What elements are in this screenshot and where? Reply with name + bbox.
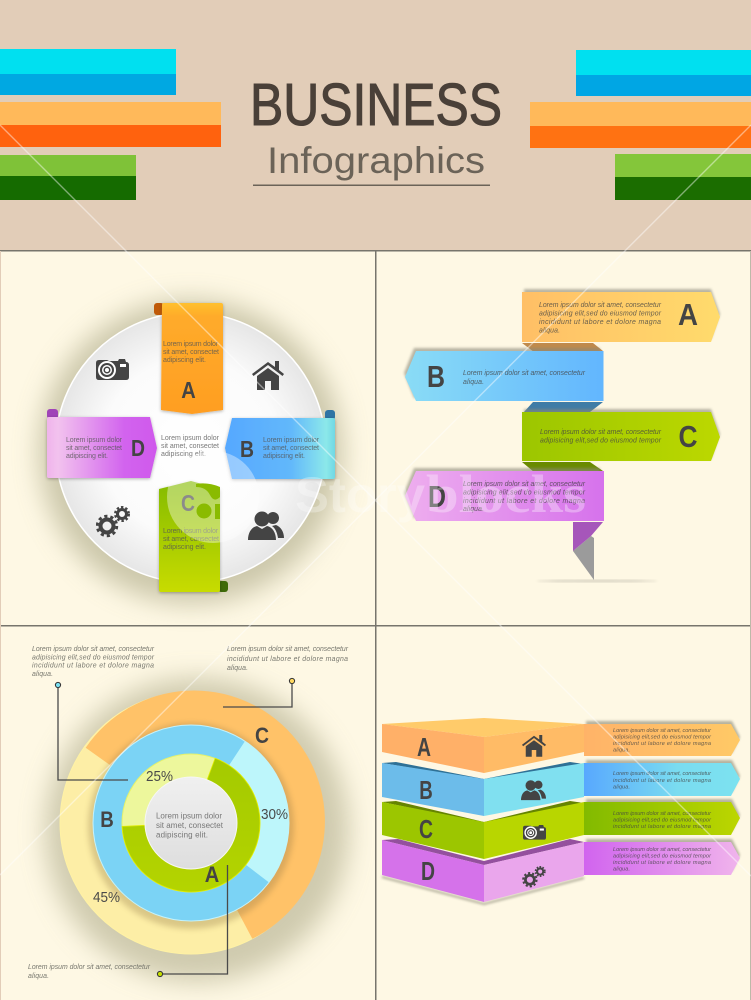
arrow D: incididunt ut labore et dolore magna — [463, 498, 585, 505]
ribbon D: adipiscing elit. — [66, 453, 108, 460]
layer C — [382, 801, 584, 859]
ribbon C: sit amet, consectet — [163, 536, 219, 543]
inner ring — [122, 754, 260, 892]
ribbon B: B — [240, 436, 254, 462]
ribbon A: adipiscing elit. — [163, 357, 206, 364]
inner ring segment A — [122, 758, 260, 892]
arrow C: adipisicing elit,sed do eiusmod tempor — [540, 438, 662, 444]
arrow A — [584, 721, 740, 756]
icon: house — [252, 361, 284, 390]
arrow D: Lorem ipsum dolor sit amet, consectetur — [613, 847, 712, 853]
arrow B: aliqua. — [463, 379, 484, 386]
centre text: Lorem ipsum dolor — [161, 435, 220, 442]
arrow B — [584, 760, 740, 796]
arrow A: incididunt ut labore et dolore magna — [613, 741, 711, 747]
callout: top right: aliqua. — [227, 665, 248, 672]
arrow A: Lorem ipsum dolor sit amet, consectetur — [613, 728, 712, 734]
ribbon B: adipiscing elit. — [263, 453, 305, 460]
callout: bottom: aliqua. — [28, 973, 49, 980]
centre text: adipiscing elit. — [161, 451, 206, 458]
right colour bars — [530, 50, 751, 200]
centre text: adipiscing elit. — [156, 830, 208, 840]
arrow C: incididunt ut labore et dolore magna — [613, 824, 711, 830]
arrow D: adipisicing elit,sed do eiusmod tempor — [463, 490, 586, 496]
layer A — [382, 718, 584, 773]
middle ring highlight segment — [229, 741, 289, 882]
ribbon D: sit amet, consectet — [66, 445, 122, 452]
callout: top left: adipisicing elit,sed do eiusmod tempor — [32, 654, 155, 662]
ribbon C: adipiscing elit. — [163, 544, 206, 551]
callout: top left — [32, 646, 155, 780]
title underline — [253, 184, 490, 186]
ribbon B: Lorem ipsum dolor — [263, 437, 320, 444]
middle ring shadow — [88, 723, 294, 929]
centre text: sit amet, consectet — [161, 443, 219, 450]
outer ring segment C — [86, 691, 325, 939]
ribbon A: sit amet, consectet — [163, 349, 219, 356]
icon: camera — [96, 359, 129, 380]
centre text — [161, 435, 220, 458]
centre text: Lorem ipsum dolor — [156, 812, 222, 820]
arrow D: D — [428, 479, 446, 514]
ribbon A: Lorem ipsum dolor — [163, 341, 219, 348]
arrow B — [404, 348, 604, 401]
arrow C: adipisicing elit,sed do eiusmod tempor — [613, 818, 712, 824]
rings shadow — [45, 678, 349, 982]
ribbon D — [47, 409, 157, 478]
panel: circular cross diagram — [39, 300, 343, 604]
callout: top right — [223, 646, 349, 707]
segment letters — [100, 723, 269, 887]
arrow A: A — [678, 297, 698, 332]
watermark — [0, 125, 751, 876]
layer B — [382, 762, 584, 816]
arrow C: Lorem ipsum dolor sit amet, consectetur — [613, 811, 712, 817]
layer D — [382, 839, 584, 904]
panel: stacked 3D layers — [382, 718, 740, 904]
arrow A: incididunt ut labore et dolore magna — [539, 319, 661, 326]
arrow D: aliqua. — [463, 506, 484, 513]
arrow A: aliqua. — [539, 328, 560, 334]
icon: people — [248, 512, 284, 540]
segment letters: A — [205, 862, 219, 887]
percentages: 30% — [261, 807, 288, 823]
percentages — [93, 769, 288, 906]
ribbon A: A — [181, 377, 196, 403]
callout: top left: aliqua. — [32, 671, 53, 678]
arrow B: B — [427, 359, 445, 394]
panel divider lines — [0, 250, 751, 1000]
arrow D: adipisicing elit,sed do eiusmod tempor — [613, 854, 712, 860]
arrow A — [522, 289, 720, 342]
ribbon B: sit amet, consectet — [263, 445, 319, 452]
left colour bars — [0, 49, 221, 200]
disc shadow — [39, 300, 343, 604]
layer C: C — [419, 814, 433, 844]
ribbon C — [159, 481, 228, 592]
arrow D: aliqua. — [613, 866, 630, 872]
disc — [56, 312, 326, 582]
arrow A: aliqua. — [613, 748, 630, 754]
arrow D — [584, 839, 740, 875]
arrow B: aliqua. — [613, 784, 630, 790]
watermark: blocks — [426, 464, 586, 524]
arrow C: C — [678, 419, 698, 454]
ribbon D: D — [131, 435, 145, 461]
percentages: 25% — [146, 769, 173, 785]
outer ring — [60, 691, 325, 954]
folded tail — [537, 522, 657, 582]
arrow C — [522, 409, 720, 461]
centre disc — [145, 777, 237, 869]
header band — [0, 0, 751, 250]
layer A: A — [417, 732, 431, 762]
arrow B: incididunt ut labore et dolore magna — [613, 778, 711, 784]
panel: concentric ring chart — [28, 646, 349, 982]
callout: bottom — [28, 865, 228, 980]
arrow B: Lorem ipsum dolor sit amet, consectetur — [613, 771, 712, 777]
ribbon D: Lorem ipsum dolor — [66, 437, 123, 444]
panel: origami arrow steps — [404, 289, 720, 582]
ribbon C: Lorem ipsum dolor — [163, 528, 219, 535]
arrow B: Lorem ipsum dolor sit amet, consectetur — [463, 370, 586, 377]
percentages: 45% — [93, 890, 120, 906]
title: BUSINESS — [250, 72, 502, 138]
arrow C — [584, 799, 740, 835]
arrow D: Lorem ipsum dolor sit amet, consectetur — [463, 481, 586, 488]
watermark: Story — [295, 467, 425, 523]
arrow A: Lorem ipsum dolor sit amet, consectetur — [539, 302, 662, 309]
arrow A: adipisicing elit,sed do eiusmod tempor — [613, 734, 712, 740]
fold connectors — [522, 343, 603, 472]
callout: top left: Lorem ipsum dolor sit amet, consectetur — [32, 646, 155, 653]
centre text: sit amet, consectet — [156, 821, 224, 830]
layer B: B — [419, 775, 433, 805]
middle ring — [93, 725, 289, 921]
centre text — [156, 812, 224, 840]
arrow C: Lorem ipsum dolor sit amet, consectetur — [540, 429, 662, 436]
arrow D: incididunt ut labore et dolore magna — [613, 860, 711, 866]
segment letters: C — [255, 723, 269, 748]
callout: top right: incididunt ut labore et dolore magna — [227, 656, 348, 663]
ribbon C: C — [181, 490, 195, 516]
callout: bottom: Lorem ipsum dolor sit amet, consectetur — [28, 964, 151, 971]
arrow A: adipisicing elit,sed do eiusmod tempor — [539, 310, 662, 318]
layer D: D — [421, 856, 435, 886]
segment letters: B — [100, 807, 114, 832]
ribbon B — [225, 410, 335, 479]
subtitle: Infographics — [267, 140, 485, 181]
arrow D — [404, 468, 604, 521]
callout: top left: incididunt ut labore et dolore magna — [32, 662, 154, 670]
callout: top right: Lorem ipsum dolor sit amet, consectetur — [227, 646, 349, 653]
icon: gears — [97, 507, 129, 536]
ribbon A — [154, 303, 223, 414]
